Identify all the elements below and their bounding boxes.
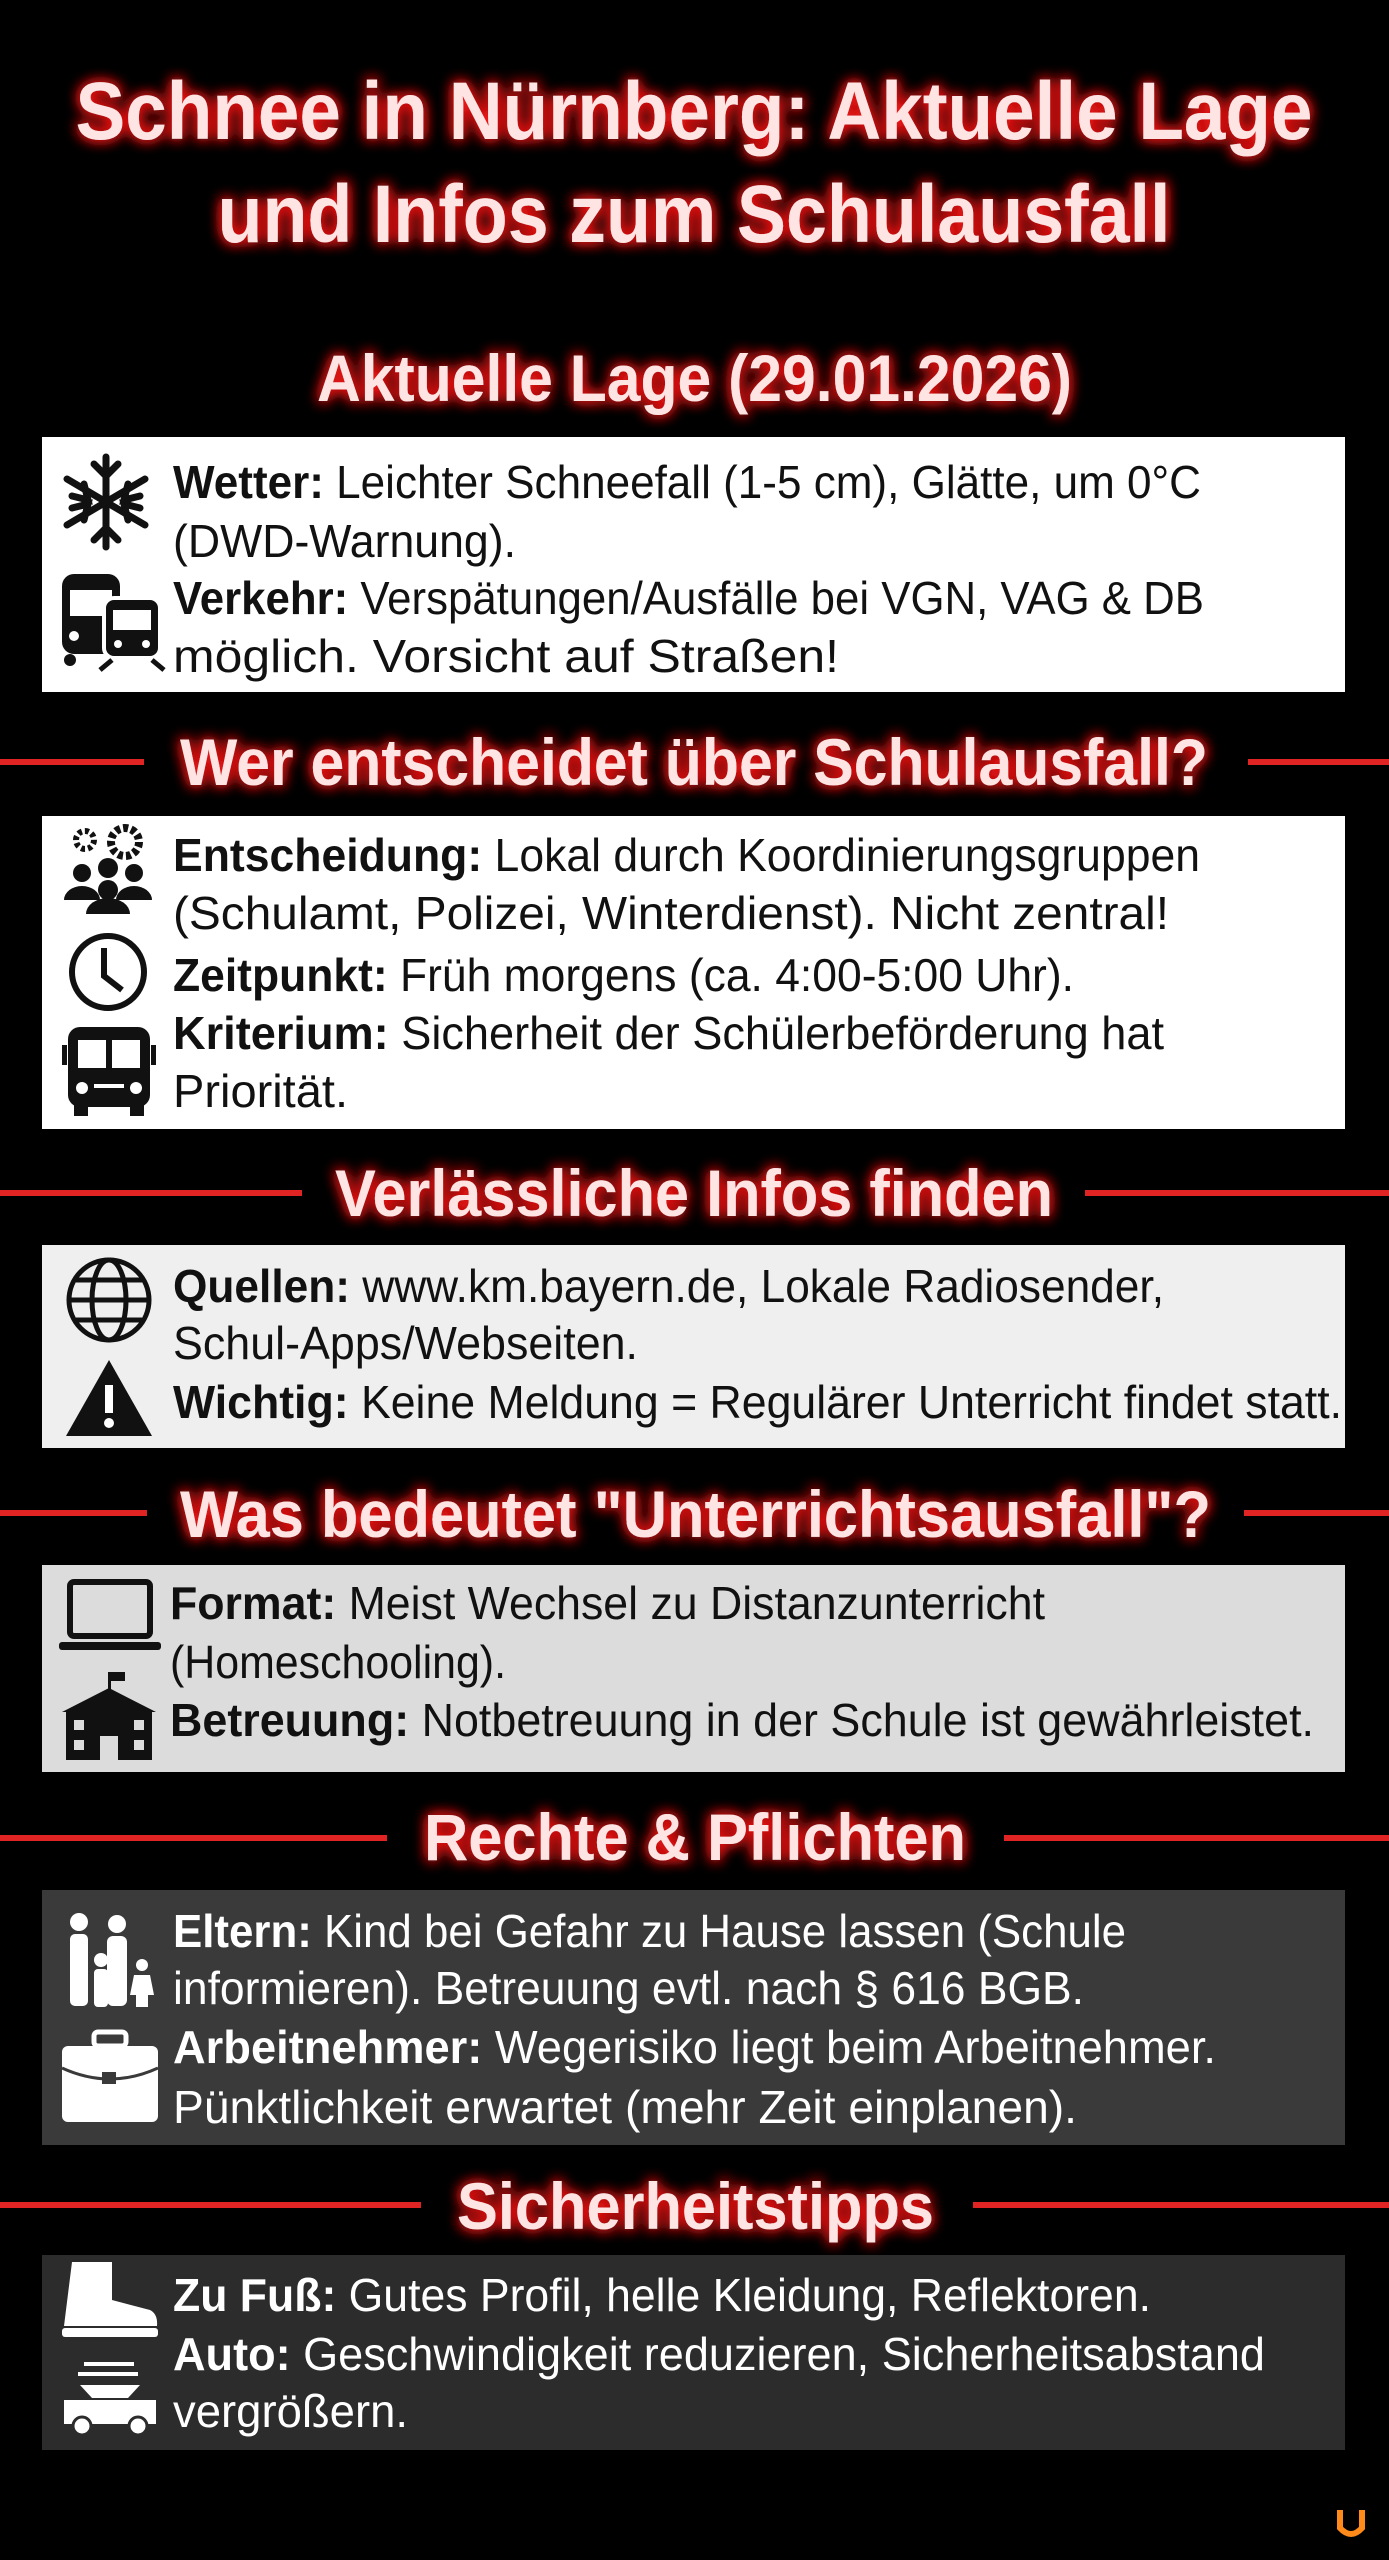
panel: unterrichtsausfall <box>42 1565 1345 1772</box>
icon: school <box>62 1672 156 1760</box>
icon: school bus <box>62 1027 156 1116</box>
heading: Verlässliche Infos <box>0 1156 1389 1230</box>
icon: boot <box>62 2262 158 2337</box>
panel: unterrichtsausfall: (Homeschooling). <box>170 1636 506 1688</box>
heading: Aktuelle Lage: Aktuelle Lage (29.01.2026) <box>317 341 1072 415</box>
text: entscheidung: Entscheidung: Lokal durch Koordinierungsgruppen <box>173 829 1200 881</box>
icon: bus and train <box>62 574 164 670</box>
icon: briefcase <box>62 2032 158 2122</box>
panel: infos <box>42 1245 1345 1448</box>
icon: car <box>64 2362 156 2435</box>
text: wichtig: Wichtig: Keine Meldung = Regulärer Unterricht findet statt. <box>173 1376 1342 1428</box>
panel: rechte <box>42 1890 1345 2145</box>
panel: rechte: informieren). Betreuung evtl. nach § 616 BGB. <box>173 1962 1084 2014</box>
text: quellen: Quellen: www.km.bayern.de, Lokale Radiosender, <box>173 1260 1164 1312</box>
title <box>76 66 1312 260</box>
heading: Sicherheitstipps <box>0 2169 1389 2243</box>
text: format: Format: Meist Wechsel zu Distanzunterricht <box>170 1577 1045 1629</box>
heading: Verlässliche Infos: Verlässliche Infos finden <box>335 1156 1053 1230</box>
text: betreuung: Betreuung: Notbetreuung in der Schule ist gewährleistet. <box>170 1694 1314 1746</box>
panel: infos: Schul-Apps/Webseiten. <box>173 1317 638 1369</box>
heading: Sicherheitstipps: Sicherheitstipps <box>457 2169 934 2243</box>
icon: globe <box>69 1260 149 1340</box>
panel: entscheidung <box>42 816 1345 1129</box>
text: arbeitnehmer: Arbeitnehmer: Wegerisiko liegt beim Arbeitnehmer. <box>173 2021 1216 2073</box>
panel: entscheidung: (Schulamt, Polizei, Winterdienst). Nicht zentral! <box>173 887 1169 939</box>
icon: people with gears <box>64 828 152 914</box>
heading: Rechte & Pflichten: Rechte & Pflichten <box>424 1800 966 1874</box>
logo <box>1340 2510 1362 2534</box>
text: zu fuss: Zu Fuß: Gutes Profil, helle Kleidung, Reflektoren. <box>173 2269 1151 2321</box>
text: wetter: Wetter: Leichter Schneefall (1-5 cm), Glätte, um 0°C <box>173 456 1201 508</box>
text: zeitpunkt: Zeitpunkt: Früh morgens (ca. 4:00-5:00 Uhr). <box>173 949 1074 1001</box>
panel: aktuelle lage: möglich. Vorsicht auf Straßen! <box>173 630 839 682</box>
icon: family <box>70 1913 154 2007</box>
panel: rechte: Pünktlichkeit erwartet (mehr Zeit einplanen). <box>173 2081 1077 2133</box>
icon: warning <box>66 1360 152 1436</box>
text: kriterium: Kriterium: Sicherheit der Schülerbeförderung hat <box>173 1007 1164 1059</box>
panel: sicherheitstipps <box>42 2255 1345 2450</box>
icon: clock <box>72 936 144 1008</box>
panel: sicherheitstipps: vergrößern. <box>173 2385 408 2437</box>
icon: laptop <box>59 1582 161 1650</box>
text: auto: Auto: Geschwindigkeit reduzieren, Sicherheitsabstand <box>173 2328 1265 2380</box>
heading: Wer entscheidet: Wer entscheidet über Schulausfall? <box>180 725 1208 799</box>
panel: entscheidung: Priorität. <box>173 1065 348 1117</box>
icon: snowflake <box>67 457 145 547</box>
heading: Unterrichtsausfall: Was bedeutet "Unterrichtsausfall"? <box>180 1477 1211 1551</box>
heading: Rechte & Pflichten <box>0 1800 1389 1874</box>
title: und Infos zum Schulausfall <box>218 169 1170 260</box>
panel: aktuelle lage <box>42 437 1345 692</box>
text: verkehr: Verkehr: Verspätungen/Ausfälle bei VGN, VAG & DB <box>173 572 1204 624</box>
panel: aktuelle lage: (DWD-Warnung). <box>173 515 516 567</box>
text: eltern: Eltern: Kind bei Gefahr zu Hause lassen (Schule <box>173 1905 1126 1957</box>
